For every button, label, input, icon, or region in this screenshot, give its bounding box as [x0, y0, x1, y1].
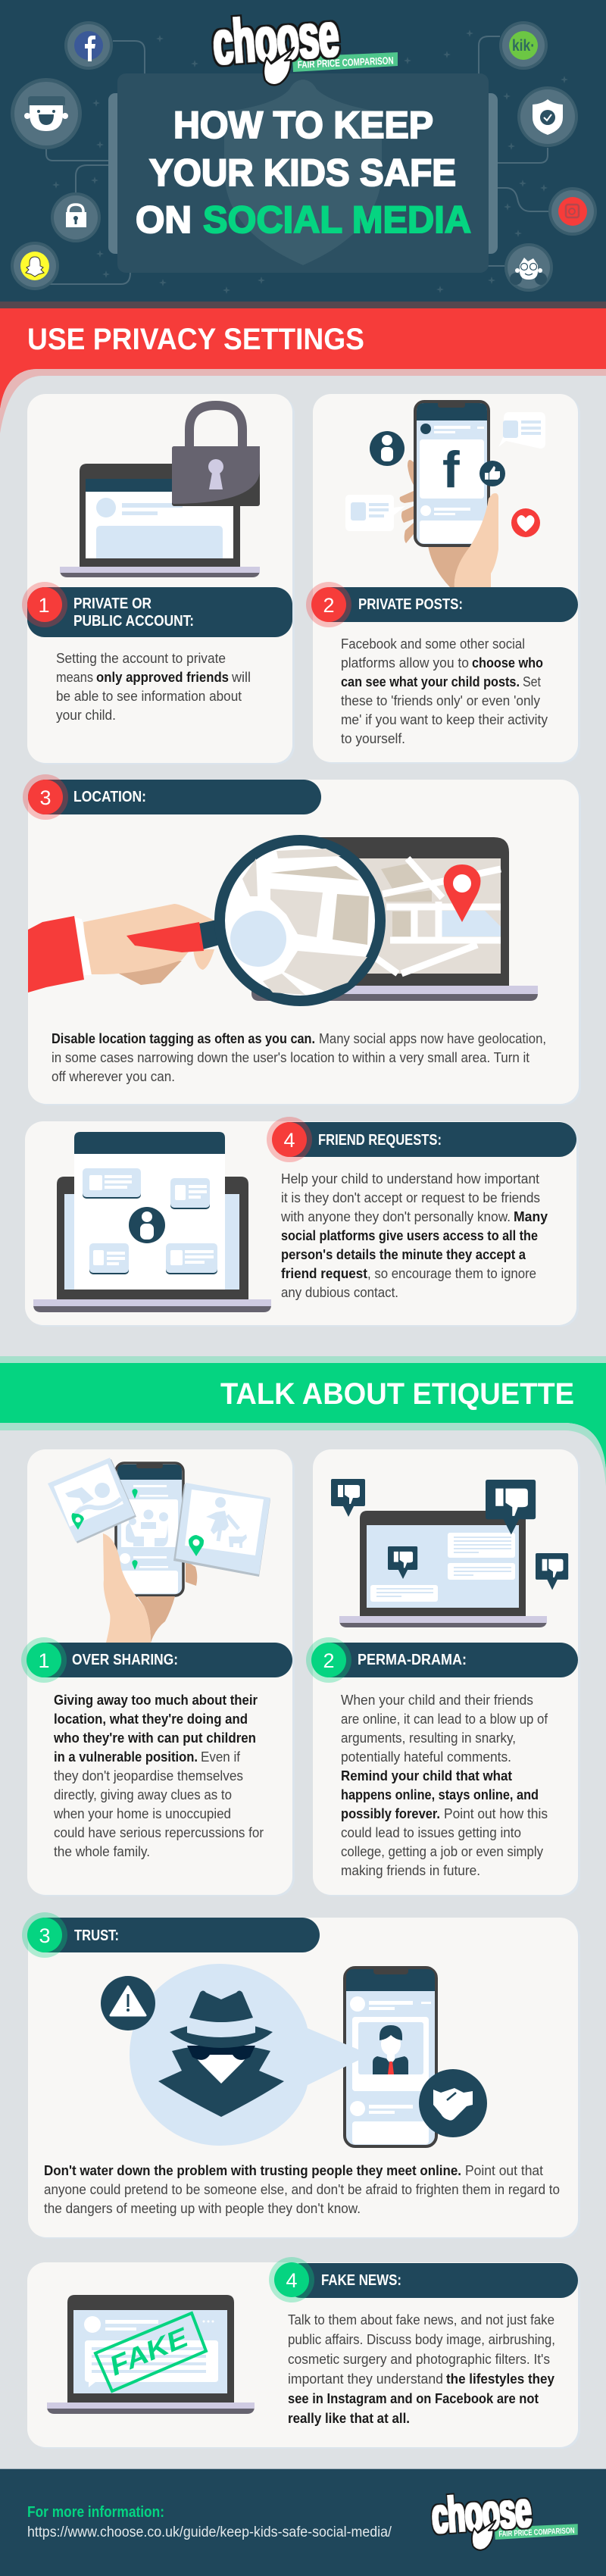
text block: [56, 651, 251, 723]
label bar: OVER SHARING:: [72, 1652, 178, 1668]
title: ON: [136, 199, 192, 241]
text block: they don't jeopardise themselves: [54, 1768, 243, 1784]
label bar: 2: [323, 594, 335, 617]
text block: potentially hateful comments.: [341, 1749, 511, 1765]
text block: it is they don't accept or request to be friends: [281, 1190, 540, 1205]
text block: [288, 2312, 555, 2426]
label bar: 1: [38, 1649, 50, 1672]
label bar: FRIEND REQUESTS:: [318, 1132, 442, 1149]
text block: the dangers of meeting up with people they don't know.: [44, 2201, 361, 2216]
text block: important they understand: [288, 2371, 443, 2387]
icon: like: [479, 461, 505, 486]
panel: private or public account: [22, 394, 295, 764]
illustration: laptop with fake stamp: [47, 2295, 255, 2414]
text block: , so encourage them to ignore: [367, 1266, 536, 1281]
text block: platforms allow you to: [341, 655, 469, 671]
title: [136, 104, 471, 241]
footer logo: FAIR PRICE COMPARISON: [498, 2526, 575, 2539]
section banner: use privacy settings: [0, 308, 606, 433]
text block: when your home is unoccupied: [53, 1806, 231, 1821]
text block: [280, 1171, 548, 1300]
icon: facebook: [64, 21, 113, 70]
text block: Point out how this: [444, 1806, 548, 1821]
icon: map pin: [444, 864, 480, 922]
text block: [341, 636, 548, 746]
title panel: [108, 73, 498, 273]
icon: kik: kik·: [512, 37, 535, 55]
text block: could lead to issues getting into: [341, 1825, 521, 1840]
text block: in a vulnerable position.: [54, 1749, 198, 1765]
label bar: FAKE NEWS:: [321, 2272, 401, 2289]
text block: in some cases narrowing down the user's location to within a very small area. Turn it: [52, 1050, 529, 1065]
label bar: LOCATION:: [73, 789, 146, 805]
text block: [52, 1031, 546, 1084]
label bar: 1: [38, 594, 50, 617]
text block: making friends in future.: [341, 1863, 480, 1878]
text block: means: [56, 670, 93, 685]
text block: choose who: [472, 655, 543, 671]
text block: Point out that: [465, 2163, 543, 2178]
text block: [53, 1693, 264, 1859]
footer logo: choose: [430, 2481, 533, 2544]
panel: fake news: [27, 2257, 580, 2449]
text block: Facebook and some other social: [341, 636, 525, 652]
icon: left speech bubble: [345, 495, 405, 531]
icon: thumbs down bubble: [486, 1480, 536, 1535]
label bar: PERMA-DRAMA:: [358, 1652, 467, 1668]
icon: heart: [511, 508, 540, 537]
text block: arguments, resulting in snarky,: [341, 1730, 516, 1746]
panel: perma-drama: [306, 1449, 580, 1896]
text block: to yourself.: [341, 731, 405, 746]
icon: laptop with padlock: [60, 405, 260, 577]
label bar: PUBLIC ACCOUNT:: [73, 613, 194, 630]
text block: [44, 2163, 560, 2216]
text block: Don't water down the problem with trusting people they meet online.: [44, 2163, 461, 2178]
label bar: 4: [283, 1129, 295, 1152]
title: YOUR KIDS SAFE: [149, 152, 456, 194]
illustration: phone with location-tagged photos: [48, 1458, 270, 1643]
label bar: 2: [323, 1649, 335, 1672]
icon: thumbs down bubble: [536, 1553, 568, 1590]
label bar: 4: [286, 2269, 298, 2292]
text block: possibly forever.: [341, 1806, 440, 1821]
text block: social platforms give users access to all the: [281, 1228, 538, 1243]
text block: really like that at all.: [288, 2411, 410, 2426]
title: HOW TO KEEP: [173, 104, 433, 146]
panel: over sharing: [21, 1449, 295, 1896]
label bar: [23, 774, 321, 820]
text block: friend request: [281, 1266, 367, 1281]
label bar: PRIVATE POSTS:: [358, 596, 463, 613]
text block: see in Instagram and on Facebook are not: [288, 2391, 539, 2406]
icon: child with glasses: [504, 243, 553, 292]
illustration: spy in speech bubble: [130, 1964, 365, 2146]
text block: will: [231, 670, 251, 685]
text block: could have serious repercussions for: [54, 1825, 264, 1840]
text block: Many social apps now have geolocation,: [319, 1031, 546, 1046]
text block: person's details the minute they accept a: [281, 1247, 526, 1262]
icon: padlock: [51, 192, 101, 242]
label bar: [306, 1637, 578, 1683]
text block: Many: [514, 1209, 548, 1224]
text block: off wherever you can.: [52, 1069, 175, 1084]
text block: Remind your child that what: [341, 1768, 512, 1784]
text block: location, what they're doing and: [54, 1712, 248, 1727]
label bar: PRIVATE OR: [73, 596, 152, 612]
icon: top speech bubble: [498, 412, 545, 449]
text block: public affairs. Discuss body image, airbrushing,: [288, 2332, 555, 2347]
icon: instagram: [548, 187, 597, 236]
text block: only approved friends: [96, 670, 229, 685]
icon: warning: [101, 1976, 155, 2030]
label bar: 3: [39, 786, 52, 809]
label bar: [269, 2257, 578, 2302]
icon: shield: [517, 86, 578, 147]
text block: Set: [523, 674, 541, 689]
title: SOCIAL MEDIA: [203, 199, 471, 241]
icon: phone in hand: [400, 402, 498, 587]
section banner: talk about etiquette: TALK ABOUT ETIQUETTE: [220, 1377, 574, 1411]
label bar: [267, 1117, 576, 1162]
text block: [341, 1693, 548, 1878]
section banner: talk about etiquette: [0, 1356, 606, 1487]
text block: are online, it can lead to a blow up of: [341, 1712, 548, 1727]
illustration: laptop with profile pop-up: [33, 1132, 271, 1312]
text block: directly, giving away clues as to: [54, 1787, 232, 1802]
icon: phone in hand: f: [442, 441, 460, 499]
text block: your child.: [56, 708, 116, 723]
label bar: 3: [39, 1924, 51, 1947]
section banner: use privacy settings: USE PRIVACY SETTINGS: [27, 323, 364, 356]
text block: the whole family.: [54, 1844, 150, 1859]
icon: boy face: [11, 78, 82, 149]
panel: friend requests: [25, 1117, 579, 1327]
text block: the lifestyles they: [446, 2371, 554, 2387]
text block: who they're with can put children: [53, 1730, 256, 1746]
panel: private posts: [306, 394, 580, 764]
illustration: laptop with comments: [339, 1511, 547, 1627]
text block: Help your child to understand how important: [281, 1171, 539, 1186]
text block: Talk to them about fake news, and not just fake: [288, 2312, 554, 2327]
footer text: For more information:: [27, 2504, 164, 2521]
text block: Setting the account to private: [56, 651, 226, 666]
icon: snapchat: [11, 242, 59, 290]
text block: happens online, stays online, and: [341, 1787, 539, 1802]
label bar: [21, 1637, 292, 1683]
illustration: laptop with fake stamp: FAKE: [105, 2321, 193, 2381]
panel: location: [23, 774, 581, 1105]
illustration: laptop with map: [251, 837, 538, 1001]
text block: Giving away too much about their: [54, 1693, 258, 1708]
panel: trust: [22, 1912, 580, 2239]
header banner: [0, 0, 606, 308]
text block: anyone could pretend to be someone else, and don't be afraid to frighten them in regard to: [44, 2182, 560, 2197]
text block: any dubious contact.: [281, 1285, 398, 1300]
footer text: [27, 2504, 392, 2540]
icon: kik: [499, 21, 548, 70]
icon: handshake: [419, 2069, 487, 2137]
icon: person: [370, 431, 405, 466]
text block: me' if you want to keep their activity: [341, 712, 548, 727]
text block: Disable location tagging as often as you can.: [52, 1031, 315, 1046]
illustration: hand and sleeve: [28, 904, 214, 993]
text block: cosmetic surgery and photographic filters. It's: [288, 2352, 550, 2367]
label bar: [22, 582, 292, 637]
text block: be able to see information about: [56, 689, 242, 704]
text block: Even if: [201, 1749, 241, 1765]
text block: When your child and their friends: [341, 1693, 533, 1708]
icon: thumbs down bubble: [388, 1546, 417, 1579]
icon: thumbs down bubble: [331, 1479, 365, 1517]
text block: with anyone they don't personally know.: [280, 1209, 511, 1224]
label bar: [306, 582, 578, 627]
illustration: phone profile: [345, 1967, 436, 2146]
text block: can see what your child posts.: [341, 674, 520, 689]
illustration: magnifying glass: [127, 840, 380, 1001]
label bar: [22, 1912, 320, 1958]
text block: college, getting a job or even simply: [341, 1844, 543, 1859]
footer: [0, 2468, 606, 2576]
label bar: TRUST:: [74, 1927, 119, 1944]
text block: these to 'friends only' or even 'only: [341, 693, 540, 708]
footer text: https://www.choose.co.uk/guide/keep-kids-safe-social-media/: [27, 2524, 392, 2540]
logo: FAIR PRICE COMPARISON: [297, 55, 394, 70]
